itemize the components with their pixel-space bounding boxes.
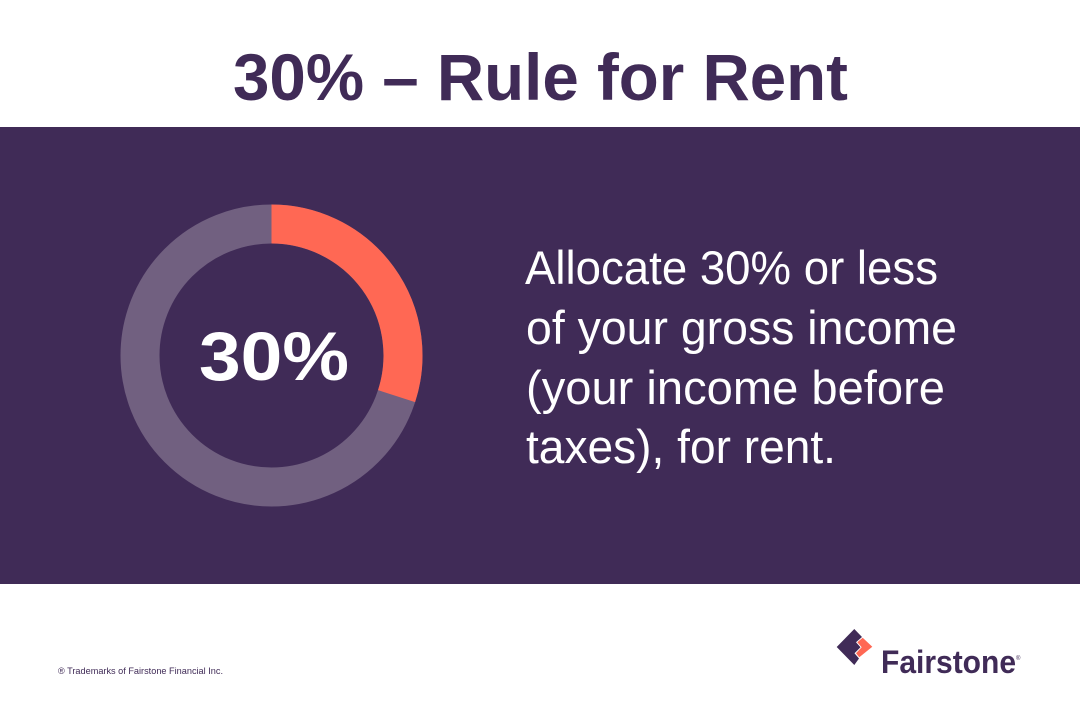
donut centre value: 30% [199, 318, 349, 395]
text block: rule explanation: taxes), for rent. [526, 420, 836, 473]
icon: diamond mark [837, 629, 872, 665]
logo: Fairstone [837, 629, 1021, 680]
title: 30% – Rule for Rent [233, 40, 848, 114]
text block: rule explanation: (your income before [526, 361, 945, 414]
text block: rule explanation: Allocate 30% or less [525, 241, 938, 294]
logo registered mark: ® [1016, 655, 1021, 662]
footnote: trademark: ® Trademarks of Fairstone Financial Inc. [58, 666, 223, 677]
text block: rule explanation [525, 241, 957, 473]
logo wordmark: Fairstone [881, 644, 1016, 680]
panel: purple band [0, 127, 1080, 584]
donut chart: 30% [140, 224, 403, 487]
text block: rule explanation: of your gross income [526, 301, 957, 354]
